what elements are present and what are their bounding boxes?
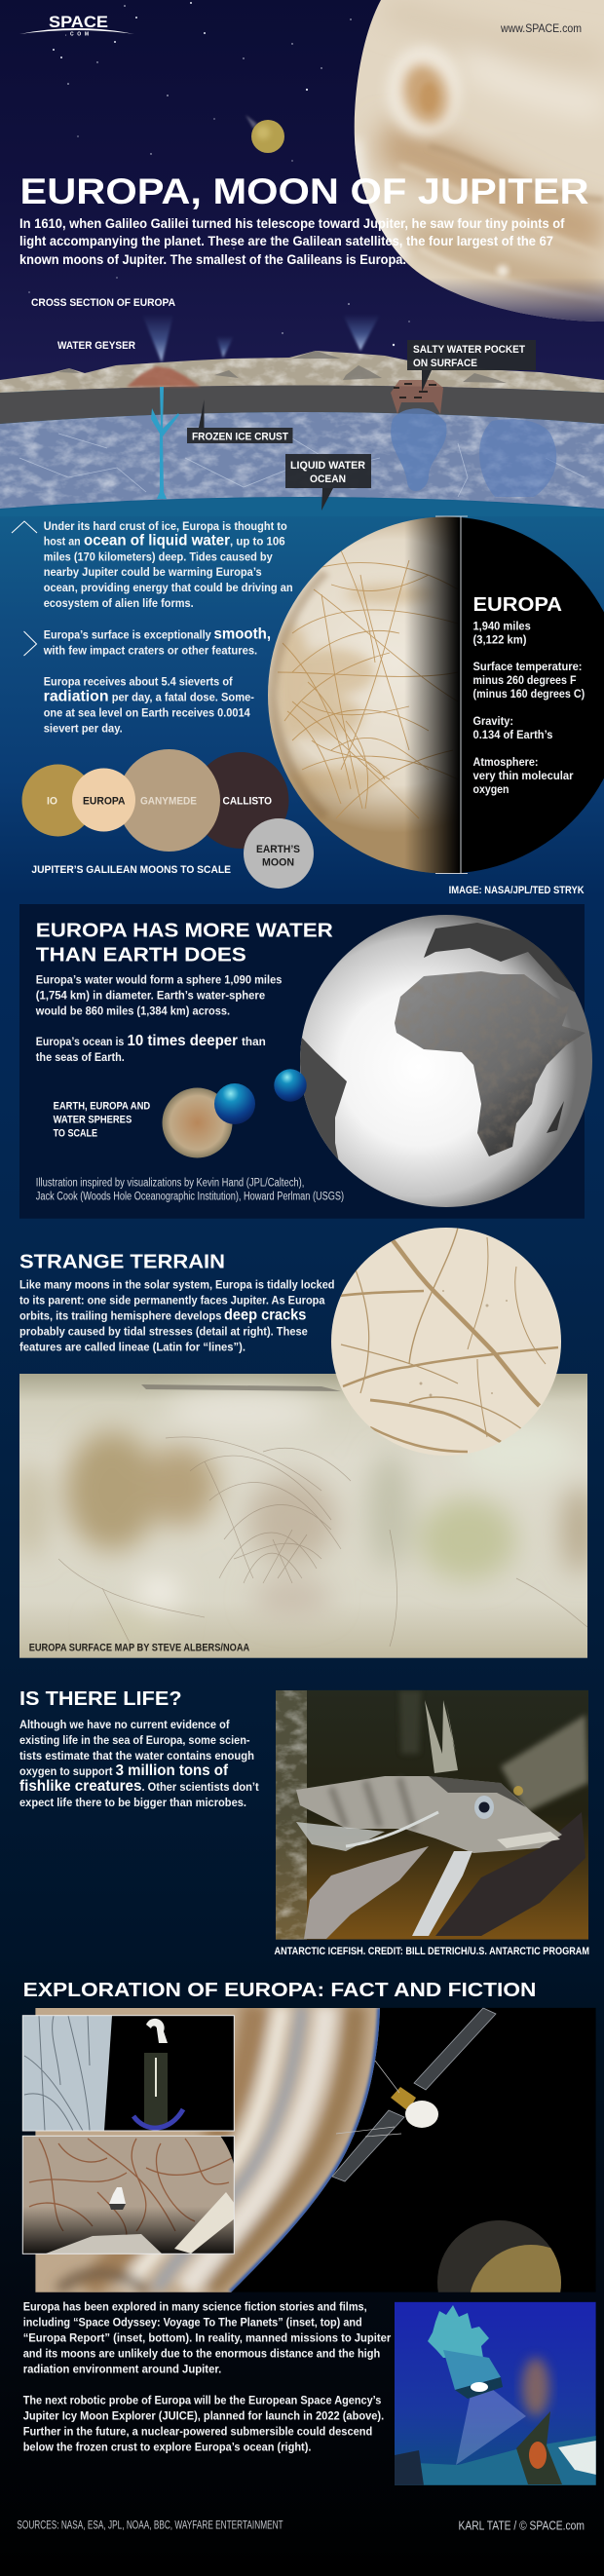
- map: Europa surface: [10, 1374, 597, 1658]
- text: liquid ocean paragraph: host an: [44, 536, 81, 548]
- photo: Antarctic icefish: [276, 1690, 588, 1940]
- text: strange terrain: [19, 1279, 335, 1354]
- label: spheres to scale: EARTH, EUROPA AND: [54, 1100, 150, 1112]
- circle: Ganymede: GANYMEDE: [140, 796, 197, 808]
- text: ocean depth: Europa’s ocean is: [36, 1036, 124, 1048]
- text: is there life: . Other scientists don’t: [142, 1781, 259, 1794]
- text: strange terrain: deep cracks: [224, 1307, 306, 1324]
- spacecraft: JUICE: [332, 2008, 496, 2181]
- text: water sphere: [35, 973, 282, 1017]
- title: EUROPA, MOON OF JUPITER: [19, 171, 588, 211]
- callout: frozen ice crust: [187, 399, 292, 443]
- text: robotic probes: The next robotic probe of Europa will be the European Space Agency’s: [23, 2394, 381, 2406]
- credit: illustration: [36, 1177, 344, 1202]
- text: ocean depth: the seas of Earth.: [36, 1051, 125, 1064]
- salty water pockets: [391, 380, 556, 497]
- text: radiation paragraph: Europa receives about 5.4 sieverts of: [44, 676, 233, 689]
- text: ocean depth: than: [242, 1036, 266, 1048]
- ocean surface: [0, 498, 604, 516]
- circle: Earth's moon: [244, 818, 314, 889]
- panel: Europa facts: oxygen: [473, 783, 509, 796]
- text: ocean depth: 10 times deeper: [127, 1033, 238, 1049]
- inset: surface crack detail: [331, 1228, 562, 1457]
- label: water geyser: WATER GEYSER: [57, 340, 135, 352]
- text: is there life: tists estimate that the water contains enough: [19, 1750, 254, 1762]
- text: liquid ocean paragraph: [44, 520, 293, 610]
- text: smooth surface paragraph: smooth,: [214, 626, 271, 643]
- circle: Callisto: [193, 752, 288, 849]
- callout: liquid water ocean: LIQUID WATER: [290, 460, 365, 472]
- callout: salty water pocket: SALTY WATER POCKET: [413, 344, 525, 356]
- text: radiation paragraph: sievert per day.: [44, 723, 123, 736]
- text: liquid ocean paragraph: ocean of liquid water: [84, 532, 230, 549]
- label: cross section heading: CROSS SECTION OF EUROPA: [31, 297, 175, 309]
- text: water sphere: would be 860 miles (1,384 km) across.: [35, 1004, 230, 1017]
- caption: map credit: EUROPA SURFACE MAP BY STEVE ALBERS/NOAA: [29, 1642, 249, 1653]
- text: fiction and reality: “Europa Report” (inset, bottom). In reality, manned missions to Jupiter: [23, 2331, 392, 2344]
- text: liquid ocean paragraph: , up to 106: [230, 536, 285, 548]
- ice layer: [0, 412, 604, 509]
- callout: salty water pocket: [407, 340, 536, 392]
- inset: Europa Report still: [22, 2136, 235, 2254]
- icon: ocean caret: [12, 521, 37, 533]
- label: spheres to scale: [54, 1100, 150, 1139]
- Jupiter limb: [35, 2005, 386, 2293]
- intro text: light accompanying the planet. These are the Galilean satellites, the four largest of the 67: [19, 234, 553, 248]
- text: strange terrain: orbits, its trailing hemisphere develops: [19, 1310, 221, 1323]
- circle: Io: [21, 764, 94, 836]
- text: liquid ocean paragraph: ecosystem of alien life forms.: [44, 597, 194, 610]
- footer: sources: SOURCES: NASA, ESA, JPL, NOAA, BBC, WAYFARE ENTERTAINMENT: [17, 2519, 283, 2531]
- text: fiction and reality: and its moons are unlikely due to the enormous distance and the high: [23, 2347, 380, 2360]
- surface terrain: [0, 351, 604, 393]
- text: radiation paragraph: per day, a fatal dose. Some-: [112, 692, 254, 703]
- circle: Io: IO: [47, 796, 57, 808]
- panel: Europa facts: (minus 160 degrees C): [473, 688, 585, 701]
- logo: SPACE.com: [19, 13, 134, 37]
- text: liquid ocean paragraph: Under its hard crust of ice, Europa is thought to: [44, 520, 287, 533]
- sphere: Earth water: [274, 1069, 307, 1102]
- frozen crust layer: [0, 386, 604, 424]
- label: moons to scale: JUPITER’S GALILEAN MOONS TO SCALE: [31, 864, 231, 876]
- inset: Space Odyssey still: [22, 2016, 234, 2131]
- moon: Io: [245, 115, 284, 153]
- text: fiction and reality: Europa has been explored in many science fiction stories and films,: [23, 2300, 367, 2313]
- image: submersible in ocean: [395, 2302, 596, 2485]
- text: is there life: oxygen to support: [19, 1765, 113, 1778]
- panel: more water than Earth: [19, 904, 594, 1219]
- moon: Ganymede: [437, 2220, 561, 2292]
- chart: Galilean moons to scale: [21, 749, 314, 889]
- cross section illustration: [0, 315, 604, 516]
- text: smooth surface paragraph: Europa’s surface is exceptionally: [44, 629, 211, 642]
- text: robotic probes: Further in the future, a nuclear-powered submersible could descend: [23, 2425, 372, 2438]
- text: strange terrain: Like many moons in the solar system, Europa is tidally locked: [19, 1279, 335, 1292]
- text: water sphere: Europa’s water would form a sphere 1,090 miles: [36, 973, 282, 986]
- callout: salty water pocket: ON SURFACE: [413, 358, 477, 369]
- text: is there life: 3 million tons of: [116, 1762, 229, 1779]
- panel: Europa facts: 1,940 miles: [473, 621, 531, 633]
- text: radiation paragraph: radiation: [44, 688, 109, 705]
- heading: more water: THAN EARTH DOES: [36, 944, 246, 966]
- sphere: Europa water: [214, 1083, 255, 1124]
- text: fiction and reality: [23, 2300, 392, 2375]
- header space scene: [0, 0, 604, 390]
- intro text: known moons of Jupiter. The smallest of the Galileans is Europa.: [19, 252, 406, 267]
- callout: frozen ice crust: FROZEN ICE CRUST: [192, 431, 288, 442]
- circle: Ganymede: [118, 749, 220, 852]
- text: is there life: expect life there to be bigger than microbes.: [19, 1797, 246, 1809]
- geyser plumes: [142, 315, 380, 362]
- text: robotic probes: Jupiter Icy Moon Explorer (JUICE), planned for launch in 2022 (above).: [23, 2409, 384, 2422]
- text: radiation paragraph: one at sea level on Earth receives 0.0014: [44, 707, 250, 720]
- label: spheres to scale: TO SCALE: [54, 1127, 97, 1139]
- intro text: [19, 216, 565, 267]
- panel: Europa facts: Surface temperature:: [473, 661, 583, 673]
- website url: www.SPACE.com: [500, 23, 582, 35]
- text: strange terrain: probably caused by tidal stresses (detail at right). These: [19, 1326, 308, 1339]
- heading: is there life: IS THERE LIFE?: [19, 1687, 182, 1710]
- credit: illustration: Illustration inspired by visualizations by Kevin Hand (JPL/Caltech),: [36, 1177, 304, 1189]
- heading: more water: [36, 920, 333, 966]
- credit: illustration: Jack Cook (Woods Hole Oceanographic Institution), Howard Perlman (USGS): [36, 1191, 344, 1202]
- label: Callisto: CALLISTO: [222, 796, 272, 808]
- panel: Europa facts: EUROPA: [473, 594, 562, 616]
- label: spheres to scale: WATER SPHERES: [54, 1114, 132, 1125]
- credit: Europa image: IMAGE: NASA/JPL/TED STRYK: [449, 885, 585, 896]
- panel: Europa facts: minus 260 degrees F: [473, 674, 577, 687]
- panel: Europa facts: [473, 594, 585, 796]
- red mound: [127, 366, 201, 387]
- text: fiction and reality: including “Space Odyssey: Voyage To The Planets” (inset, top) and: [23, 2316, 362, 2329]
- circle: Earth's moon: MOON: [262, 857, 294, 869]
- circle: Europa: [72, 768, 135, 832]
- panel: Europa facts: (3,122 km): [473, 634, 527, 647]
- text: liquid ocean paragraph: nearby Jupiter could be warming Europa’s: [44, 566, 262, 579]
- heading: more water: EUROPA HAS MORE WATER: [36, 920, 333, 942]
- panel: Europa facts: very thin molecular: [473, 770, 574, 782]
- text: fiction and reality: radiation environment around Jupiter.: [23, 2363, 221, 2375]
- callout: liquid water ocean: OCEAN: [310, 474, 346, 485]
- text: strange terrain: features are called lineae (Latin for “lines”).: [19, 1342, 245, 1354]
- planet: Jupiter: [341, 0, 604, 331]
- text: is there life: existing life in the sea of Europa, some scien-: [19, 1734, 250, 1747]
- text: liquid ocean paragraph: miles (170 kilometers) deep. Tides caused by: [44, 551, 273, 563]
- globe: Earth without oceans: [300, 915, 594, 1207]
- text: radiation paragraph: [44, 676, 254, 736]
- text: smooth surface paragraph: with few impact craters or other features.: [43, 645, 257, 658]
- text: is there life: Although we have no current evidence of: [19, 1719, 230, 1731]
- logo: SPACE.com: SPACE: [49, 13, 108, 31]
- moon: Europa large globe: [263, 511, 604, 877]
- heading: strange terrain: STRANGE TERRAIN: [19, 1251, 225, 1273]
- panel: Europa facts: Atmosphere:: [473, 756, 538, 769]
- text: smooth surface paragraph: [43, 626, 271, 658]
- sphere: small Europa: [162, 1087, 232, 1157]
- heading: exploration: EXPLORATION OF EUROPA: FACT AND FICTION: [23, 1979, 536, 2001]
- text: strange terrain: to its parent: one side permanently faces Jupiter. As Europa: [19, 1295, 325, 1307]
- text: water sphere: (1,754 km) in diameter. Earth’s water-sphere: [36, 989, 266, 1002]
- panel: Europa facts: 0.134 of Earth’s: [473, 729, 553, 741]
- callout: liquid water ocean: [285, 454, 371, 511]
- text: robotic probes: [23, 2394, 384, 2453]
- text: robotic probes: below the frozen crust to explore Europa’s ocean (right).: [23, 2441, 311, 2453]
- panel: Europa facts: Gravity:: [473, 715, 513, 728]
- text: is there life: fishlike creatures: [19, 1778, 142, 1795]
- text: ocean depth: [36, 1033, 266, 1064]
- text: liquid ocean paragraph: ocean, providing energy that could be driving an: [44, 582, 293, 594]
- intro text: In 1610, when Galileo Galilei turned his telescope toward Jupiter, he saw four tiny points of: [19, 216, 565, 231]
- circle: Europa: EUROPA: [83, 796, 126, 808]
- water column: [151, 387, 179, 499]
- image: JUICE at Jupiter: [35, 2007, 596, 2292]
- text: is there life: [19, 1719, 259, 1809]
- logo: SPACE.com: .COM: [65, 31, 89, 37]
- icon: surface chevron: [23, 631, 37, 656]
- circle: Earth's moon: EARTH’S: [256, 844, 300, 855]
